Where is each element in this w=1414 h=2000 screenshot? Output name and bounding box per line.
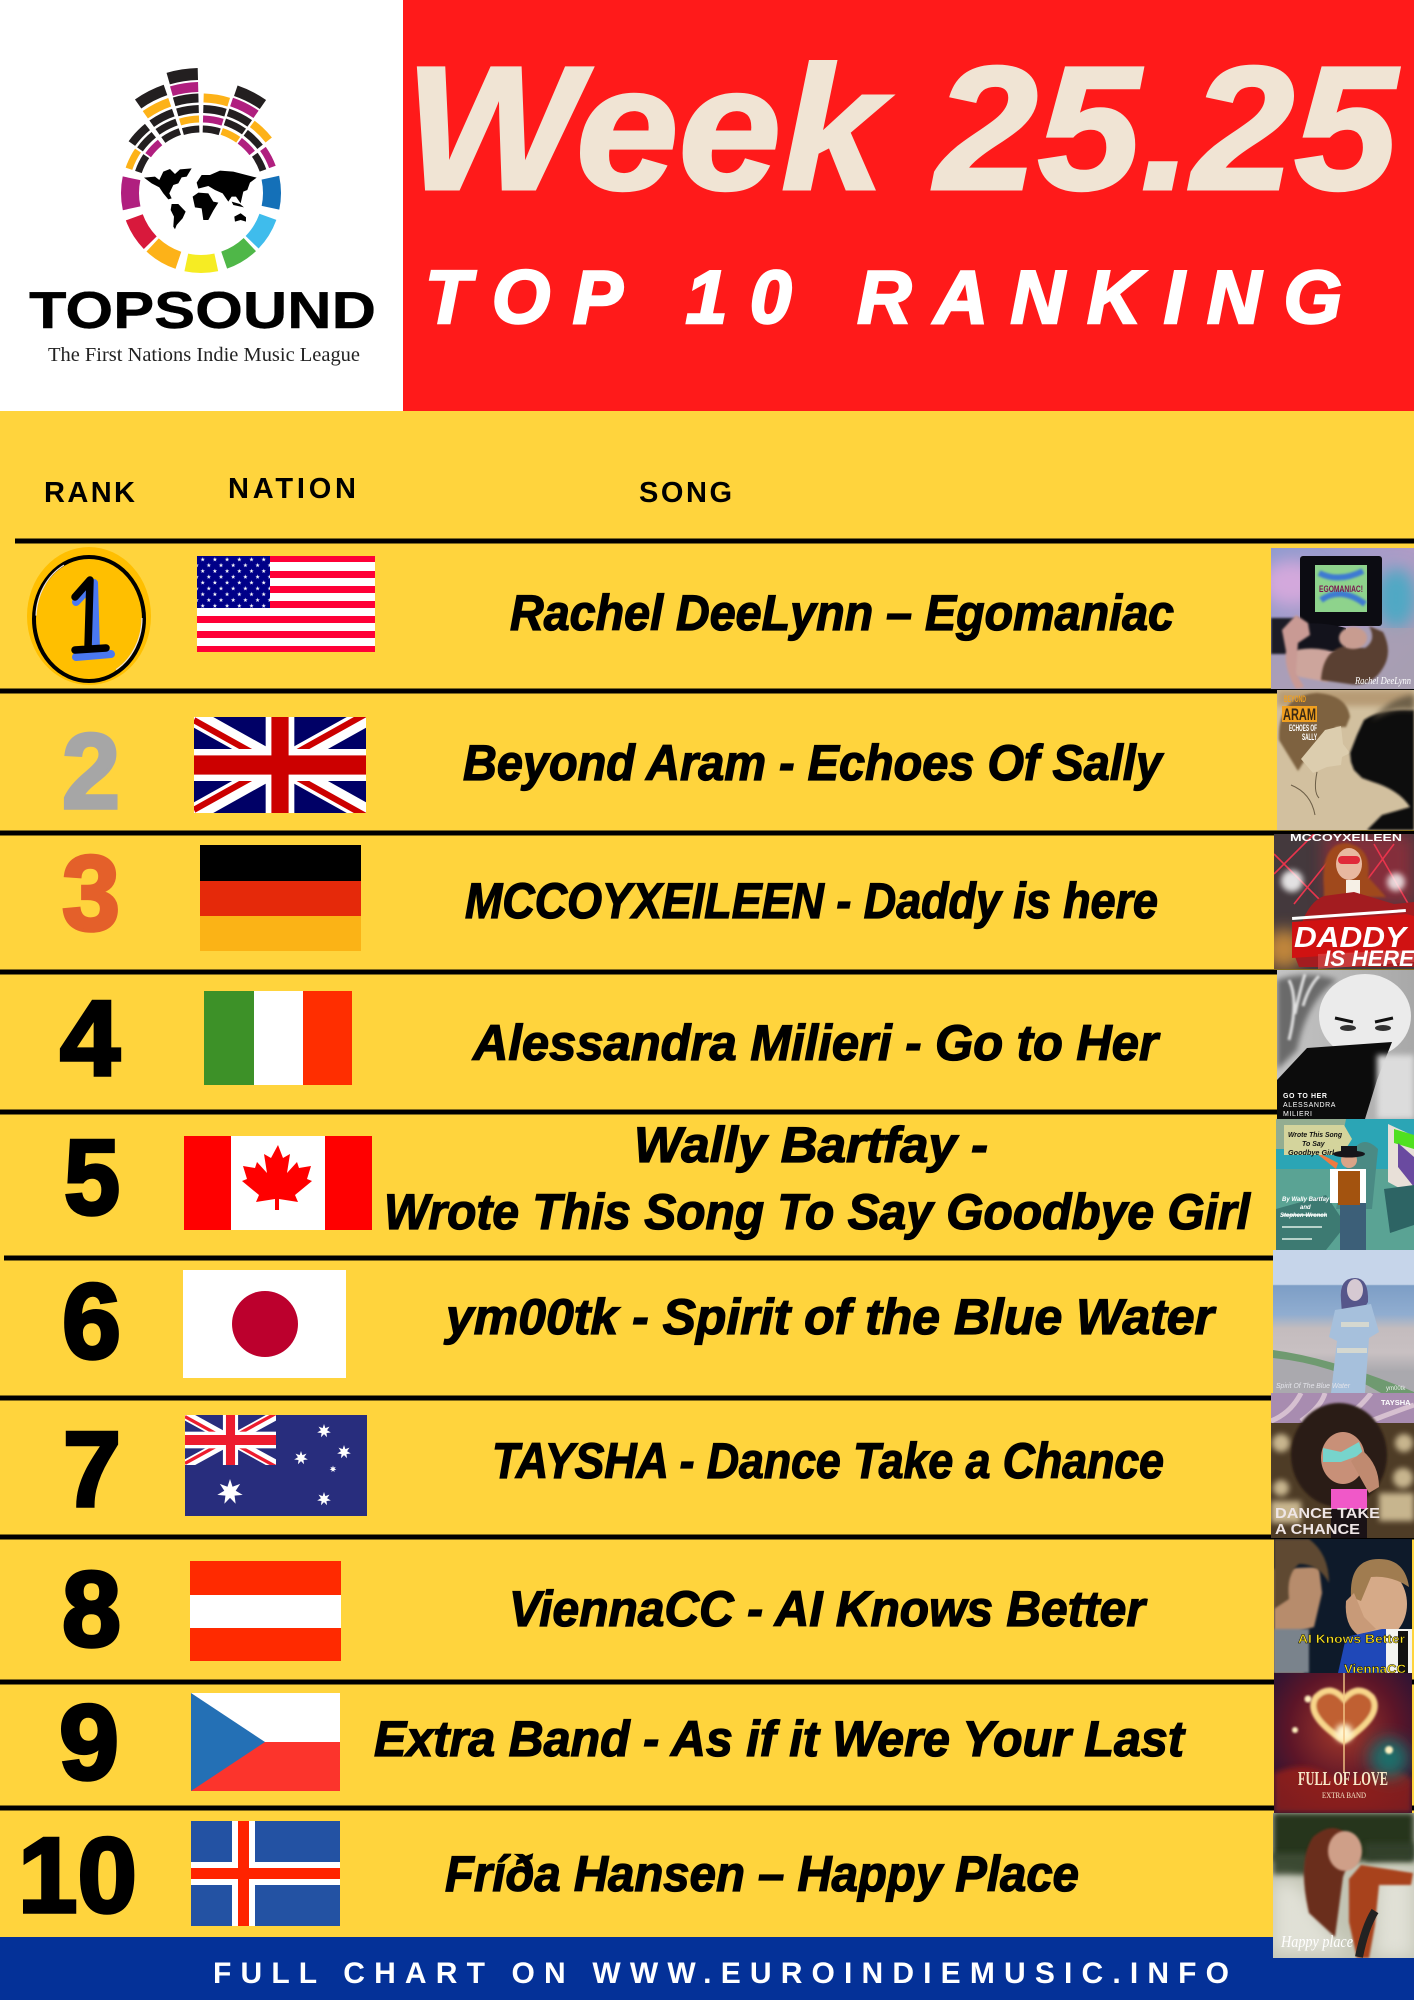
cover art: Echoes Of Sally: ECHOES OF xyxy=(1289,723,1317,733)
song 3: MCCOYXEILEEN - Daddy is here xyxy=(465,873,1158,929)
rank 9: 9 xyxy=(59,1682,119,1802)
cover art: Go to Her: ALESSANDRA xyxy=(1283,1102,1336,1109)
cover art: Happy Place xyxy=(1273,1813,1414,1958)
logo tagline: The First Nations Indie Music League xyxy=(48,344,360,366)
song 8: ViennaCC - AI Knows Better xyxy=(509,1581,1147,1637)
row 5 xyxy=(64,1117,1251,1240)
rank 7: 7 xyxy=(63,1409,121,1529)
cover art: Wrote This Song: Goodbye Girl xyxy=(1288,1150,1335,1157)
cover art: Daddy is here: MCCOYXEILEEN xyxy=(1290,833,1402,844)
cover art: Spirit of the Blue Water xyxy=(1273,1250,1414,1393)
header: song: SONG xyxy=(639,477,732,509)
footer xyxy=(0,1937,1414,2000)
cover art: Spirit of the Blue Water: ym00tk xyxy=(1386,1386,1406,1392)
cover art: Echoes Of Sally xyxy=(1277,690,1414,830)
row 6 xyxy=(62,1261,1217,1381)
flag: USA xyxy=(197,556,375,652)
row 7 xyxy=(63,1409,1164,1529)
row 10 xyxy=(18,1815,1079,1935)
row 3 xyxy=(62,833,1158,953)
column headers xyxy=(44,473,732,509)
icon: equalizer arcs and colour ring xyxy=(49,41,353,345)
row 9 xyxy=(59,1682,1186,1802)
cover art: Wrote This Song: To Say xyxy=(1302,1141,1326,1148)
rank 3: 3 xyxy=(62,833,120,953)
cover art: Wrote This Song: and xyxy=(1300,1205,1311,1211)
rank 10: 10 xyxy=(18,1815,137,1935)
rank 8: 8 xyxy=(62,1549,121,1669)
cover art: Go to Her xyxy=(1277,970,1414,1119)
flag: Czechia xyxy=(191,1693,340,1791)
cover art: Echoes Of Sally: SALLY xyxy=(1302,732,1317,742)
cover art: AI Knows Better: AI Knows Better xyxy=(1298,1632,1405,1646)
flag: Iceland xyxy=(191,1821,340,1926)
song 7: TAYSHA - Dance Take a Chance xyxy=(492,1433,1164,1489)
song 6: ym00tk - Spirit of the Blue Water xyxy=(443,1289,1217,1345)
cover art: AI Knows Better xyxy=(1274,1539,1412,1676)
flag: Canada xyxy=(184,1136,372,1230)
cover art: Dance Take a Chance: DANCE TAKE xyxy=(1275,1505,1380,1522)
header: rank: RANK xyxy=(44,477,135,509)
cover art: Egomaniac: EGOMANIAC! xyxy=(1319,584,1363,594)
rank 6: 6 xyxy=(62,1261,121,1381)
flag: Japan xyxy=(183,1270,346,1378)
flag: Austria xyxy=(190,1561,341,1661)
rank 2: 2 xyxy=(62,711,120,831)
title: week number: Week 25.25 xyxy=(405,31,1399,227)
cover art: Wrote This Song: Wrote This Song xyxy=(1288,1132,1343,1139)
rank 5: 5 xyxy=(64,1117,120,1237)
row 8 xyxy=(62,1549,1147,1669)
subtitle: TOP 10 RANKING xyxy=(425,255,1342,339)
song 5 line 1: Wally Bartfay - xyxy=(634,1117,988,1173)
cover art: Dance Take a Chance: A CHANCE xyxy=(1275,1521,1360,1538)
cover art: Dance Take a Chance xyxy=(1271,1393,1414,1538)
panel: logo xyxy=(0,0,403,411)
row 4 xyxy=(60,978,1160,1098)
song 5 line 2: Wrote This Song To Say Goodbye Girl xyxy=(384,1184,1251,1240)
cover art: Full of Love xyxy=(1274,1673,1412,1813)
cover art: Egomaniac xyxy=(1271,548,1414,689)
logo wordmark: TOPSOUND xyxy=(29,282,376,340)
cover art: Go to Her: MILIERI xyxy=(1283,1111,1312,1118)
flag: Germany xyxy=(200,845,361,951)
cover art: Go to Her: GO TO HER xyxy=(1283,1093,1328,1100)
cover art: Wrote This Song: Stephen Wrench xyxy=(1280,1213,1328,1219)
cover art: Daddy is here: IS HERE xyxy=(1324,946,1414,971)
flag: Australia xyxy=(185,1413,367,1516)
flag: UK xyxy=(194,714,366,816)
cover art: Echoes Of Sally: BEYOND xyxy=(1284,694,1306,704)
song 1: Rachel DeeLynn – Egomaniac xyxy=(510,585,1174,641)
rank 1 badge xyxy=(27,547,151,685)
song 9: Extra Band - As if it Were Your Last xyxy=(374,1711,1186,1767)
song 10: Fríða Hansen – Happy Place xyxy=(445,1846,1079,1902)
rank 4: 4 xyxy=(60,978,120,1098)
cover art: Wrote This Song xyxy=(1276,1119,1414,1250)
panel: title xyxy=(403,0,1414,411)
cover art: Happy Place: Happy place xyxy=(1280,1932,1353,1951)
cover art: Daddy is here: DADDY xyxy=(1294,922,1409,954)
cover art: AI Knows Better: ViennaCC xyxy=(1344,1662,1406,1676)
row 2 xyxy=(62,711,1164,831)
song 2: Beyond Aram - Echoes Of Sally xyxy=(463,735,1164,791)
footer link: FULL CHART ON WWW.EUROINDIEMUSIC.INFO xyxy=(213,1957,1229,1990)
cover art: Dance Take a Chance: TAYSHA xyxy=(1381,1398,1411,1407)
cover art: Echoes Of Sally: ARAM xyxy=(1283,705,1316,724)
icon: world map xyxy=(144,168,257,229)
cover art: Wrote This Song: By Wally Bartfay xyxy=(1282,1197,1330,1203)
song 4: Alessandra Milieri - Go to Her xyxy=(471,1015,1160,1071)
flag: Italy xyxy=(204,991,352,1085)
cover art: Spirit of the Blue Water: Spirit Of The Blue Water xyxy=(1276,1381,1350,1390)
header: nation: NATION xyxy=(228,473,356,505)
row 1 xyxy=(27,547,1174,685)
cover art: Full of Love: EXTRA BAND xyxy=(1322,1791,1366,1800)
cover art: Daddy is here xyxy=(1274,833,1414,971)
